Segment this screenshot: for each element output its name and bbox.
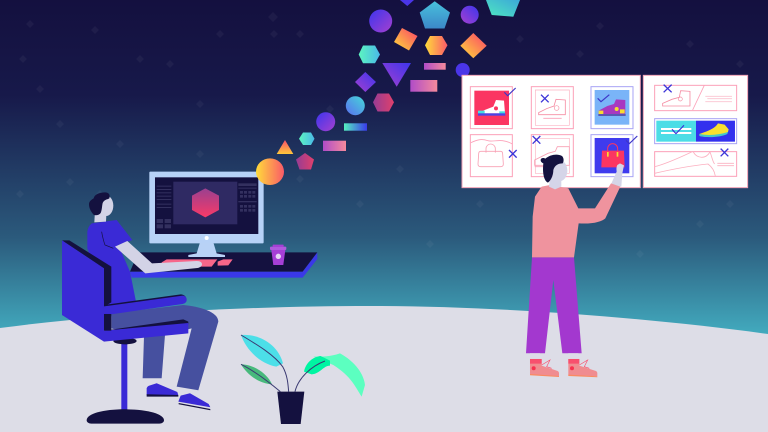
desk <box>130 252 317 278</box>
card: outlined sneaker rejected lower <box>531 135 573 177</box>
card: outlined handbag rejected <box>470 135 517 177</box>
panel: product banners right <box>643 75 748 188</box>
pants <box>526 257 582 353</box>
plant in pot <box>241 335 365 424</box>
banner: outlined sneaker rejected <box>655 85 737 111</box>
shoes <box>530 359 597 377</box>
torso <box>87 220 136 305</box>
back leg and pants <box>111 305 218 390</box>
neck and head <box>94 209 107 222</box>
arm <box>115 241 202 273</box>
background stars <box>16 12 744 258</box>
banner: outlined shoe closeup rejected <box>655 149 737 176</box>
banner: selected yellow running shoe <box>655 119 737 144</box>
floating gradient shapes stream <box>256 0 520 185</box>
card: red sneaker selected <box>470 87 516 129</box>
ground <box>0 306 768 432</box>
panel: product cards left <box>462 75 640 188</box>
card: outlined sneaker rejected <box>531 87 573 129</box>
card: purple sneaker selected <box>591 87 633 129</box>
ankles <box>530 353 578 359</box>
standing woman <box>526 155 624 377</box>
coffee cup <box>270 245 286 265</box>
card: red handbag selected <box>591 135 637 177</box>
sweater <box>532 183 620 257</box>
seated designer <box>87 192 218 410</box>
keyboard and mouse <box>162 259 233 267</box>
raised forearm and hand <box>611 163 624 187</box>
monitor <box>149 172 264 257</box>
hair <box>89 192 110 215</box>
shoes <box>147 383 178 395</box>
office chair back and arms <box>62 240 188 342</box>
neck and head <box>549 177 561 189</box>
hair with bun <box>541 155 564 183</box>
office chair base and stem <box>87 338 164 424</box>
